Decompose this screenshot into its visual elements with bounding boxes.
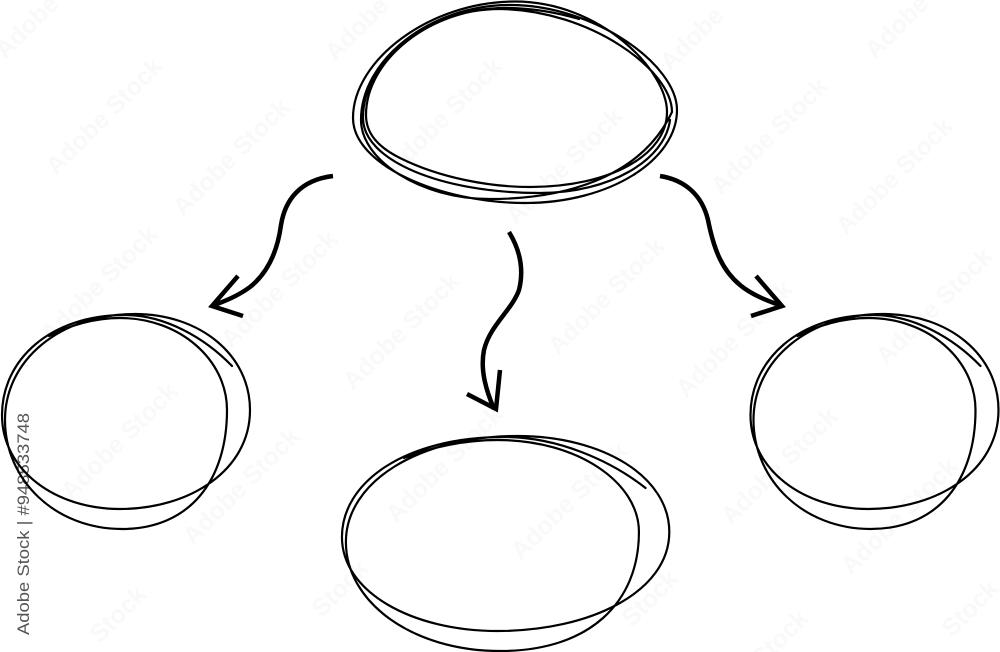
- text: Adobe Stock: [215, 225, 343, 353]
- text: Stock: [306, 554, 374, 622]
- text: Adobe Stock: [870, 242, 998, 370]
- text: Adobe Stock: [830, 112, 958, 240]
- text: Adobe: [654, 1, 729, 76]
- text: Adobe Stock: [167, 93, 295, 221]
- text: Adobe Stock: [40, 52, 168, 180]
- text: Adobe Stock: [542, 232, 670, 360]
- text: Adobe Stock: [500, 102, 628, 230]
- text: Adobe Stock: [705, 72, 833, 200]
- arrow: right: [660, 176, 782, 316]
- text: Adobe Stock: [715, 402, 843, 530]
- text: Adobe Stock: [177, 422, 305, 550]
- right scribbled circle: [750, 314, 998, 529]
- text: Stock: [616, 564, 684, 632]
- top scribbled oval: [353, 2, 677, 203]
- text: Adobe Stock: [505, 437, 633, 565]
- text: Adobe Stock: [55, 377, 183, 505]
- text: Adobe Stock: [380, 400, 508, 528]
- stock id label: Adobe Stock | #948533748: [14, 413, 33, 635]
- arrow: left: [212, 176, 333, 316]
- left scribbled circle: [2, 314, 250, 529]
- text: Adobe Stock: [337, 267, 465, 395]
- text: Adobe Stock: [380, 52, 508, 180]
- bottom scribbled oval: [342, 436, 669, 651]
- arrow: middle: [467, 232, 521, 409]
- text: Adobe Stock: [35, 220, 163, 348]
- text: Adobe Stock: [670, 275, 798, 403]
- text: Adobe Stock: [835, 452, 963, 580]
- text: Stock: [84, 580, 152, 648]
